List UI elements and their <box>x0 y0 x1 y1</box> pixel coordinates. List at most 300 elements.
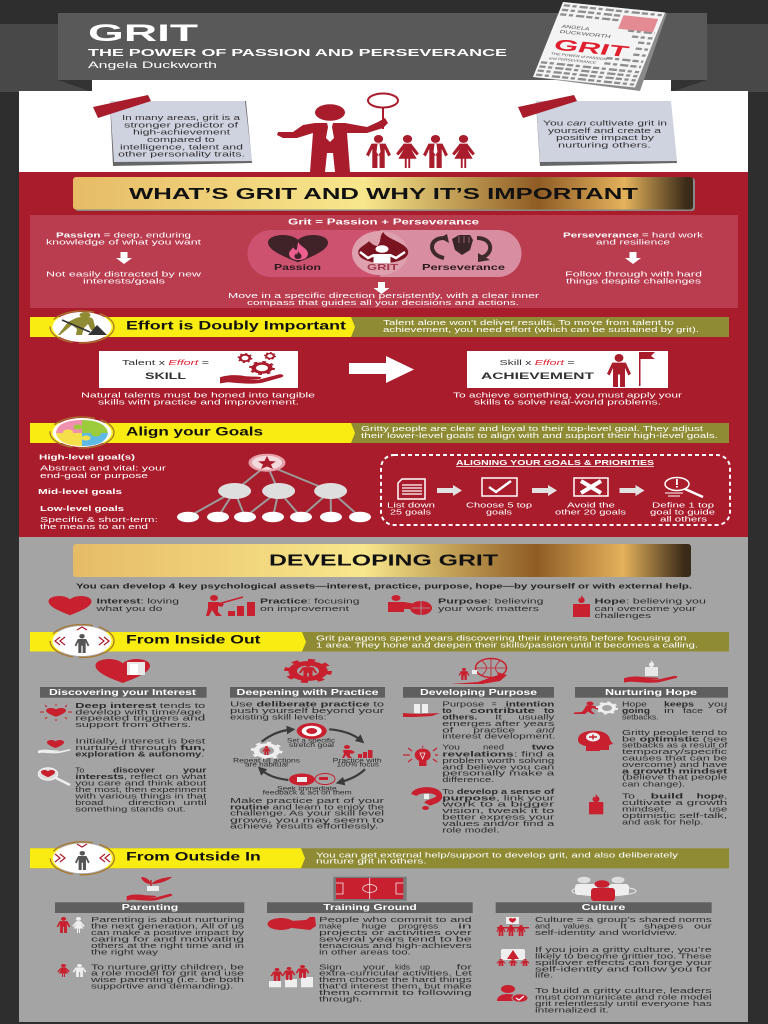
text: build culture: internalized it. <box>535 1005 609 1014</box>
text: routine: challenge. As your skill level <box>230 809 385 818</box>
subtitle: THE POWER OF PASSION AND PERSEVERANCE <box>88 47 507 59</box>
step: define: all others <box>660 514 707 524</box>
column: deepening with practice <box>230 660 385 831</box>
text: optimistic: a growth mindset <box>622 766 728 775</box>
goal level labels: Specific & short-term: <box>40 515 158 524</box>
header: Parenting <box>122 903 178 912</box>
label: stretch goal: stretch goal <box>289 743 334 749</box>
text: culture definition: our <box>694 921 713 930</box>
text: keeps going: in <box>664 706 674 715</box>
text: commit: in other areas too. <box>319 947 411 956</box>
text: sense of purpose: vision, tweak it to <box>442 806 554 815</box>
perseverance text <box>563 230 703 286</box>
description: achievement, you need effort (which can be sustained by grit). <box>383 325 699 334</box>
note: cultivate grit: yourself and create a <box>548 126 662 135</box>
text: commit: tenacious and high-achievers <box>319 941 472 950</box>
icon: runners on blocks <box>269 965 313 987</box>
text: commit: People who commit to and <box>319 915 472 924</box>
icon: interest heart <box>48 596 92 615</box>
text: sign kids up: that’d interest them, but make <box>319 982 472 991</box>
text: discover: with various things in that <box>74 791 206 800</box>
text: sign kids up <box>319 962 473 1003</box>
perseverance text: Follow through with hard <box>565 270 702 278</box>
text: nurturing: others at the right time and in <box>91 941 244 950</box>
heading: developing grit: DEVELOPING GRIT <box>269 552 498 570</box>
direction text: Move in a specific direction persistently, with a clear inner <box>228 291 540 300</box>
step: choose <box>466 478 532 516</box>
text: sense of purpose: To develop a sense of <box>442 787 555 796</box>
header <box>230 687 385 698</box>
description: 1 area. They hone and deepen their skills/passion until it becomes a calling. <box>316 640 698 650</box>
icon badge: outside in <box>50 842 114 875</box>
text: optimistic: setbacks as a result of <box>622 741 727 750</box>
label passion: Passion <box>274 262 321 272</box>
label: feedback: Seek immediate <box>277 786 338 792</box>
text: sign kids up: your <box>363 962 386 971</box>
skill caption: Natural talents must be honed into tangible <box>81 391 315 400</box>
description: Talent alone won’t deliver results. To move from talent to <box>383 318 674 327</box>
text: sign kids up: kids <box>395 962 410 971</box>
banner: from outside in <box>30 842 729 875</box>
text: revelations: two <box>532 743 555 752</box>
text: build culture: To build a gritty culture, leaders <box>535 986 712 995</box>
heading: From Outside In <box>126 852 261 864</box>
text: commit: huge <box>362 921 387 930</box>
book cover: GRIT <box>551 36 633 60</box>
icon: gift on hand <box>403 704 440 717</box>
label grit: GRIT <box>367 262 399 272</box>
text: build hope: cultivate a growth <box>622 798 727 807</box>
asset: hope <box>594 597 706 620</box>
text: build culture: grit relentlessly until everyone has <box>535 999 712 1008</box>
note: grit predictor: In many areas, grit is a <box>122 113 241 122</box>
text: nurturing <box>91 915 245 956</box>
text: culture definition: Culture = a group’s shared norms <box>535 915 712 924</box>
text: deliberate practice <box>230 700 385 721</box>
icon: heart with door <box>96 659 150 683</box>
panel: grit equation <box>30 215 738 308</box>
author: Angela Duckworth <box>88 60 217 71</box>
text: sense of purpose: better express your <box>442 813 555 822</box>
text: nurturing: the right way <box>91 947 159 956</box>
icon: flame with person <box>358 232 408 263</box>
text: deep interest: develop with time/age, <box>75 707 205 716</box>
text: nurtured: exploration & autonomy . <box>75 750 204 759</box>
label: stretch goal: Set a specific <box>287 739 335 745</box>
description: their lower-level goals to align with and support their high-level goals. <box>361 431 718 440</box>
text: discover: something stands out. <box>75 804 186 813</box>
arrow <box>437 485 462 496</box>
text: purpose: to <box>442 706 453 715</box>
description <box>383 318 699 334</box>
text: culture definition: shapes <box>644 921 684 930</box>
icon: fist and arrows <box>432 234 490 262</box>
header <box>267 902 473 913</box>
asset: interest: Interest : loving <box>96 597 179 606</box>
title: GRIT <box>88 20 198 47</box>
asset row <box>48 595 706 620</box>
text: commit <box>319 915 473 956</box>
text: build hope: build <box>651 792 683 801</box>
text: optimistic: (believe that people <box>622 773 727 782</box>
text: deliberate practice: push yourself beyond your <box>230 706 385 715</box>
note: cultivate grit: You can cultivate grit in <box>543 118 667 128</box>
heading: Align your Goals <box>126 426 263 438</box>
icon: feedback bubbles <box>289 774 335 786</box>
text: purpose: = <box>492 700 497 709</box>
text: sign kids up: through. <box>319 994 362 1003</box>
icon: leader with magnifier and team <box>277 94 475 172</box>
arrow down <box>374 282 390 294</box>
icon: hope candle <box>573 595 590 617</box>
icon: light bulb <box>403 746 438 766</box>
description: You can get external help/support to develop grit, and also deliberately <box>316 850 678 859</box>
text: commit: make <box>319 921 342 930</box>
text: routine: Make practice part of your <box>230 796 385 805</box>
text: purpose: others. <box>442 712 477 721</box>
step: list <box>387 479 435 516</box>
box: talent to skill: Talent x Effort = <box>122 358 210 367</box>
text: sense of purpose: purpose , link your <box>442 793 555 802</box>
banner: align goals <box>30 417 729 448</box>
text: commit: in <box>458 921 472 930</box>
label: practice <box>333 758 382 769</box>
achievement caption: To achieve something, you must apply your <box>453 391 683 400</box>
icon: practice focus <box>342 745 372 758</box>
icon: hand with heart <box>38 740 71 753</box>
header: Training Ground <box>323 903 417 912</box>
text: build hope: use <box>709 805 727 814</box>
step: define: goal to guide <box>650 508 715 516</box>
text: revelations <box>442 743 555 784</box>
asset: interest: what you do <box>95 604 162 613</box>
text: role model: a role model for grit and use <box>91 969 244 978</box>
text: keeps going: face <box>683 706 703 715</box>
text: discover <box>74 766 207 813</box>
text: optimistic: can change). <box>622 779 685 788</box>
red section panel <box>19 172 748 538</box>
text: keeps going: going <box>622 706 650 715</box>
text: routine: achieve results effortlessly. <box>230 822 378 831</box>
text: sign kids up: extra-curricular activities. Let <box>319 969 472 978</box>
text: discover: you care and think about <box>75 778 206 787</box>
goal level labels: High-level goal(s) <box>39 453 136 462</box>
text: revelations: revelations : find a <box>442 749 554 758</box>
text: routine: routine and learn to enjoy the <box>230 802 384 811</box>
icon: radiant heart <box>40 704 72 721</box>
grit diagram <box>248 230 522 277</box>
icon: runner and gear <box>574 702 617 714</box>
asset: practice <box>260 597 360 613</box>
icon: purpose <box>388 595 432 615</box>
icon: sports field <box>333 877 407 901</box>
header: Discovering your Interest <box>49 688 196 697</box>
icon: gear with person <box>287 660 329 682</box>
text: optimistic: overcome) and have <box>622 760 727 769</box>
text: revelations: problem worth solving <box>442 756 554 765</box>
passion text: Passion = deep, enduring <box>56 230 191 240</box>
note: grit predictor: high-achievement <box>133 128 231 136</box>
asset: purpose: Purpose : believing <box>438 597 544 606</box>
text: purpose: and <box>536 725 556 734</box>
goal level labels: end-goal or purpose <box>40 471 148 480</box>
label perseverance: Perseverance <box>422 262 505 272</box>
icon badge: puzzle <box>50 417 114 448</box>
direction text: compass that guides all your decisions and actions. <box>247 298 519 307</box>
book cover: ANGELA <box>561 24 590 32</box>
text: build hope: To <box>622 792 635 801</box>
icon: practice <box>206 595 255 616</box>
goal hierarchy tree <box>177 454 371 522</box>
description: nurture grit in others. <box>316 857 427 866</box>
text: culture definition: self-identity and worldview. <box>535 928 677 937</box>
icon: plant on hand <box>127 877 172 901</box>
box: skill to achievement: ACHIEVEMENT <box>481 371 595 381</box>
goal level labels: Abstract and vital: your <box>40 464 167 473</box>
text: purpose: to <box>544 706 555 715</box>
label: feedback <box>263 786 352 797</box>
text: build hope: mindset, <box>622 805 667 814</box>
text: sense of purpose: values and/or find a <box>442 819 554 828</box>
achievement caption: skills to solve real-world problems. <box>474 398 661 407</box>
book cover: DUCKWORTH <box>559 30 611 40</box>
perseverance text: and resilience <box>596 238 670 246</box>
header <box>496 902 712 913</box>
book cover <box>533 2 667 91</box>
text: purpose: emerges after years <box>442 719 555 728</box>
text: build culture <box>535 986 712 1014</box>
passion text: Not easily distracted by new <box>46 270 202 278</box>
text: purpose: usually <box>518 712 555 721</box>
text: culture definition: It <box>620 921 627 930</box>
text: nurturing: caring for and motivating <box>91 935 244 944</box>
text: optimistic: Gritty people tend to <box>622 728 727 737</box>
text: revelations: You <box>442 743 460 752</box>
box: skill to achievement: Skill x Effort = <box>500 358 576 367</box>
white intro panel <box>19 91 748 173</box>
step: define: Define 1 top <box>652 500 714 510</box>
icon badge: digging worker <box>50 311 114 343</box>
text: purpose: contribute <box>470 706 535 715</box>
label: repeat <box>233 758 300 769</box>
arrow: skill to achievement <box>349 356 414 383</box>
text: build hope: and ask for help. <box>622 818 703 827</box>
column: training ground <box>267 877 473 1003</box>
icon: group of people <box>572 877 636 901</box>
direction text <box>228 291 540 307</box>
text: deep interest <box>75 701 205 729</box>
gray section panel <box>19 537 748 1022</box>
column: discovering your interest <box>38 659 207 813</box>
text: culture definition <box>535 915 713 937</box>
text: routine <box>230 796 385 831</box>
intro sentence: You can develop 4 key psychological assets—interest, practice, purpose, hope—by yourself or with external help. <box>76 582 692 591</box>
icon: gritty group <box>496 949 530 966</box>
text: revelations: personally make a <box>442 769 554 778</box>
text: purpose: interest development. <box>442 732 555 741</box>
asset: purpose: your work matters <box>438 604 539 613</box>
text: sign kids up: for <box>457 962 473 971</box>
text: purpose <box>442 700 556 741</box>
description <box>361 424 718 440</box>
text: culture definition: and <box>535 921 550 930</box>
icon: person with flag <box>607 352 655 387</box>
text: culture definition: values. <box>563 921 592 930</box>
step: avoid: Avoid the <box>567 500 615 510</box>
step: avoid <box>555 478 626 516</box>
text: role model: supportive and demanding). <box>91 982 233 991</box>
text: build hope: optimistic self-talk, <box>622 811 727 820</box>
passion text: knowledge of what you want <box>46 238 202 246</box>
asset: hope: can overcome your <box>594 604 697 613</box>
note: grit predictor: compared to <box>147 135 215 144</box>
box: talent to skill <box>99 351 298 388</box>
panel: aligning goals and priorities <box>381 455 730 525</box>
text: join culture: self-identity and follow you for <box>535 964 713 973</box>
achievement caption <box>453 391 683 407</box>
banner: from inside out <box>30 624 729 658</box>
text: sign kids up: them choose the hard things <box>319 975 472 984</box>
text: keeps going: keeps <box>664 700 694 709</box>
perseverance text: things despite challenges <box>566 276 701 286</box>
goal level labels: the means to an end <box>40 522 148 531</box>
asset: hope: Hope : believing you <box>594 597 706 606</box>
text: commit: several years tend to be <box>319 935 472 944</box>
perseverance text: Perseverance = hard work <box>563 230 703 240</box>
text: revelations: difference. <box>442 775 494 784</box>
asset: purpose <box>438 597 544 613</box>
text: join culture: likely to become grittier too. These <box>535 951 712 960</box>
text: discover: the most, then experiment <box>75 785 206 794</box>
description <box>316 633 698 650</box>
text: purpose: of <box>442 725 453 734</box>
text: join culture: spillover effects can forge your <box>535 958 713 967</box>
text: optimistic: be optimistic (see <box>622 734 727 743</box>
icon: target <box>297 723 327 739</box>
label: feedback: feedback & act on them <box>263 791 352 797</box>
text: sign kids up: Sign <box>319 962 342 971</box>
asset: hope: challenges <box>594 611 651 620</box>
icon: heart with flame <box>268 235 328 262</box>
text: sign kids up: them commit to following <box>319 988 472 997</box>
text: nurturing: Parenting is about nurturing <box>91 915 244 924</box>
box: talent to skill: SKILL <box>145 371 186 381</box>
book cover: and PERSEVERANCE <box>548 56 597 65</box>
text: discover: your <box>183 766 207 775</box>
text: optimistic: causes that can be <box>622 754 727 763</box>
text: sense of purpose: work to a bigger <box>440 800 556 809</box>
step: choose: goals <box>486 508 512 516</box>
arrow <box>620 485 644 496</box>
asset: practice: Practice : focusing <box>260 597 360 606</box>
header ribbon <box>58 13 707 92</box>
text: purpose: Purpose <box>442 700 484 709</box>
equation heading: Grit = Passion + Perseverance <box>288 218 480 226</box>
banner: effort <box>30 311 729 343</box>
icon: hand with gears <box>220 352 283 384</box>
panel heading: ALIGNING YOUR GOALS & PRIORITIES <box>456 458 654 467</box>
header: Nurturing Hope <box>605 688 698 697</box>
text: build culture: must communicate and role model <box>535 993 712 1002</box>
text: deep interest: support from others. <box>75 720 191 729</box>
description: Gritty people are clear and loyal to their top-level goal. They adjust <box>361 424 704 433</box>
step: list: 25 goals <box>390 508 431 516</box>
text: routine: grows, you may seem to <box>230 815 384 824</box>
book cover: THE POWER of PASSION <box>550 51 608 61</box>
note: grit predictor: intelligence, talent and <box>120 142 243 152</box>
text: deep interest: Deep interest tends to <box>75 701 205 710</box>
label: stretch goal <box>287 739 335 749</box>
text: purpose: practice <box>473 725 515 734</box>
icon badge: inside out <box>50 624 114 658</box>
text: keeps going: Hope <box>622 700 647 709</box>
text: optimistic: temporary/specific <box>622 747 728 756</box>
passion text: interests/goals <box>83 276 165 286</box>
icon: leader with check <box>497 985 528 1002</box>
asset: practice: on improvement <box>260 604 351 613</box>
header band <box>0 24 768 92</box>
text: join culture: life. <box>535 971 553 980</box>
text: join culture <box>535 945 713 980</box>
goal level labels: Low-level goals <box>40 504 124 513</box>
text: discover: discover <box>113 766 155 775</box>
heading: Effort is Doubly Important <box>126 320 346 332</box>
column: parenting <box>55 877 245 991</box>
step: avoid: other 20 goals <box>555 508 626 516</box>
icon: hand with candle <box>624 660 677 683</box>
text: discover: direction <box>128 798 175 807</box>
note: cultivate grit <box>518 95 677 166</box>
text: nurtured <box>75 737 205 759</box>
column: culture <box>496 877 713 1014</box>
icon: magnifier with heart <box>38 768 70 785</box>
box: skill to achievement <box>467 351 668 388</box>
arrow <box>532 485 557 496</box>
text: purpose: It <box>495 712 502 721</box>
label: practice: Practice with <box>333 758 382 764</box>
text: deep interest: repeated triggers and <box>75 714 205 723</box>
text: purpose: intention <box>506 700 554 709</box>
text: optimistic <box>622 728 728 788</box>
heading: developing grit <box>73 544 691 577</box>
practice cycle diagram <box>233 723 382 797</box>
skill caption: skills with practice and improvement. <box>98 398 299 407</box>
text: role model: wise parenting (i.e. be both <box>89 975 244 984</box>
text: commit: projects or activities over <box>319 928 473 937</box>
text: sense of purpose <box>440 787 556 834</box>
text: role model: To nurture gritty children, be <box>91 962 244 971</box>
header <box>40 687 207 698</box>
text: role model <box>89 962 244 991</box>
icon: candle <box>589 794 603 814</box>
header: Developing Purpose <box>420 688 538 697</box>
heading: From Inside Out <box>126 635 261 647</box>
heading: what's grit: WHAT’S GRIT AND WHY IT’S IMPORTANT <box>129 186 638 203</box>
text: deliberate practice: existing skill levels: <box>230 712 327 721</box>
text: discover: until <box>183 798 207 807</box>
step: define <box>650 478 715 524</box>
text: revelations: and believe you can <box>442 762 554 771</box>
text: commit: progress <box>398 921 439 930</box>
column: developing purpose <box>403 658 556 834</box>
icon: globe and climber <box>451 658 507 684</box>
skill caption <box>81 391 315 407</box>
note: grit predictor: other personality traits. <box>118 150 245 158</box>
icon: connected people <box>496 917 529 936</box>
note: cultivate grit: nurturing others. <box>558 140 651 150</box>
text: keeps going: setbacks. <box>622 712 659 721</box>
step: choose: Choose 5 top <box>466 500 532 510</box>
